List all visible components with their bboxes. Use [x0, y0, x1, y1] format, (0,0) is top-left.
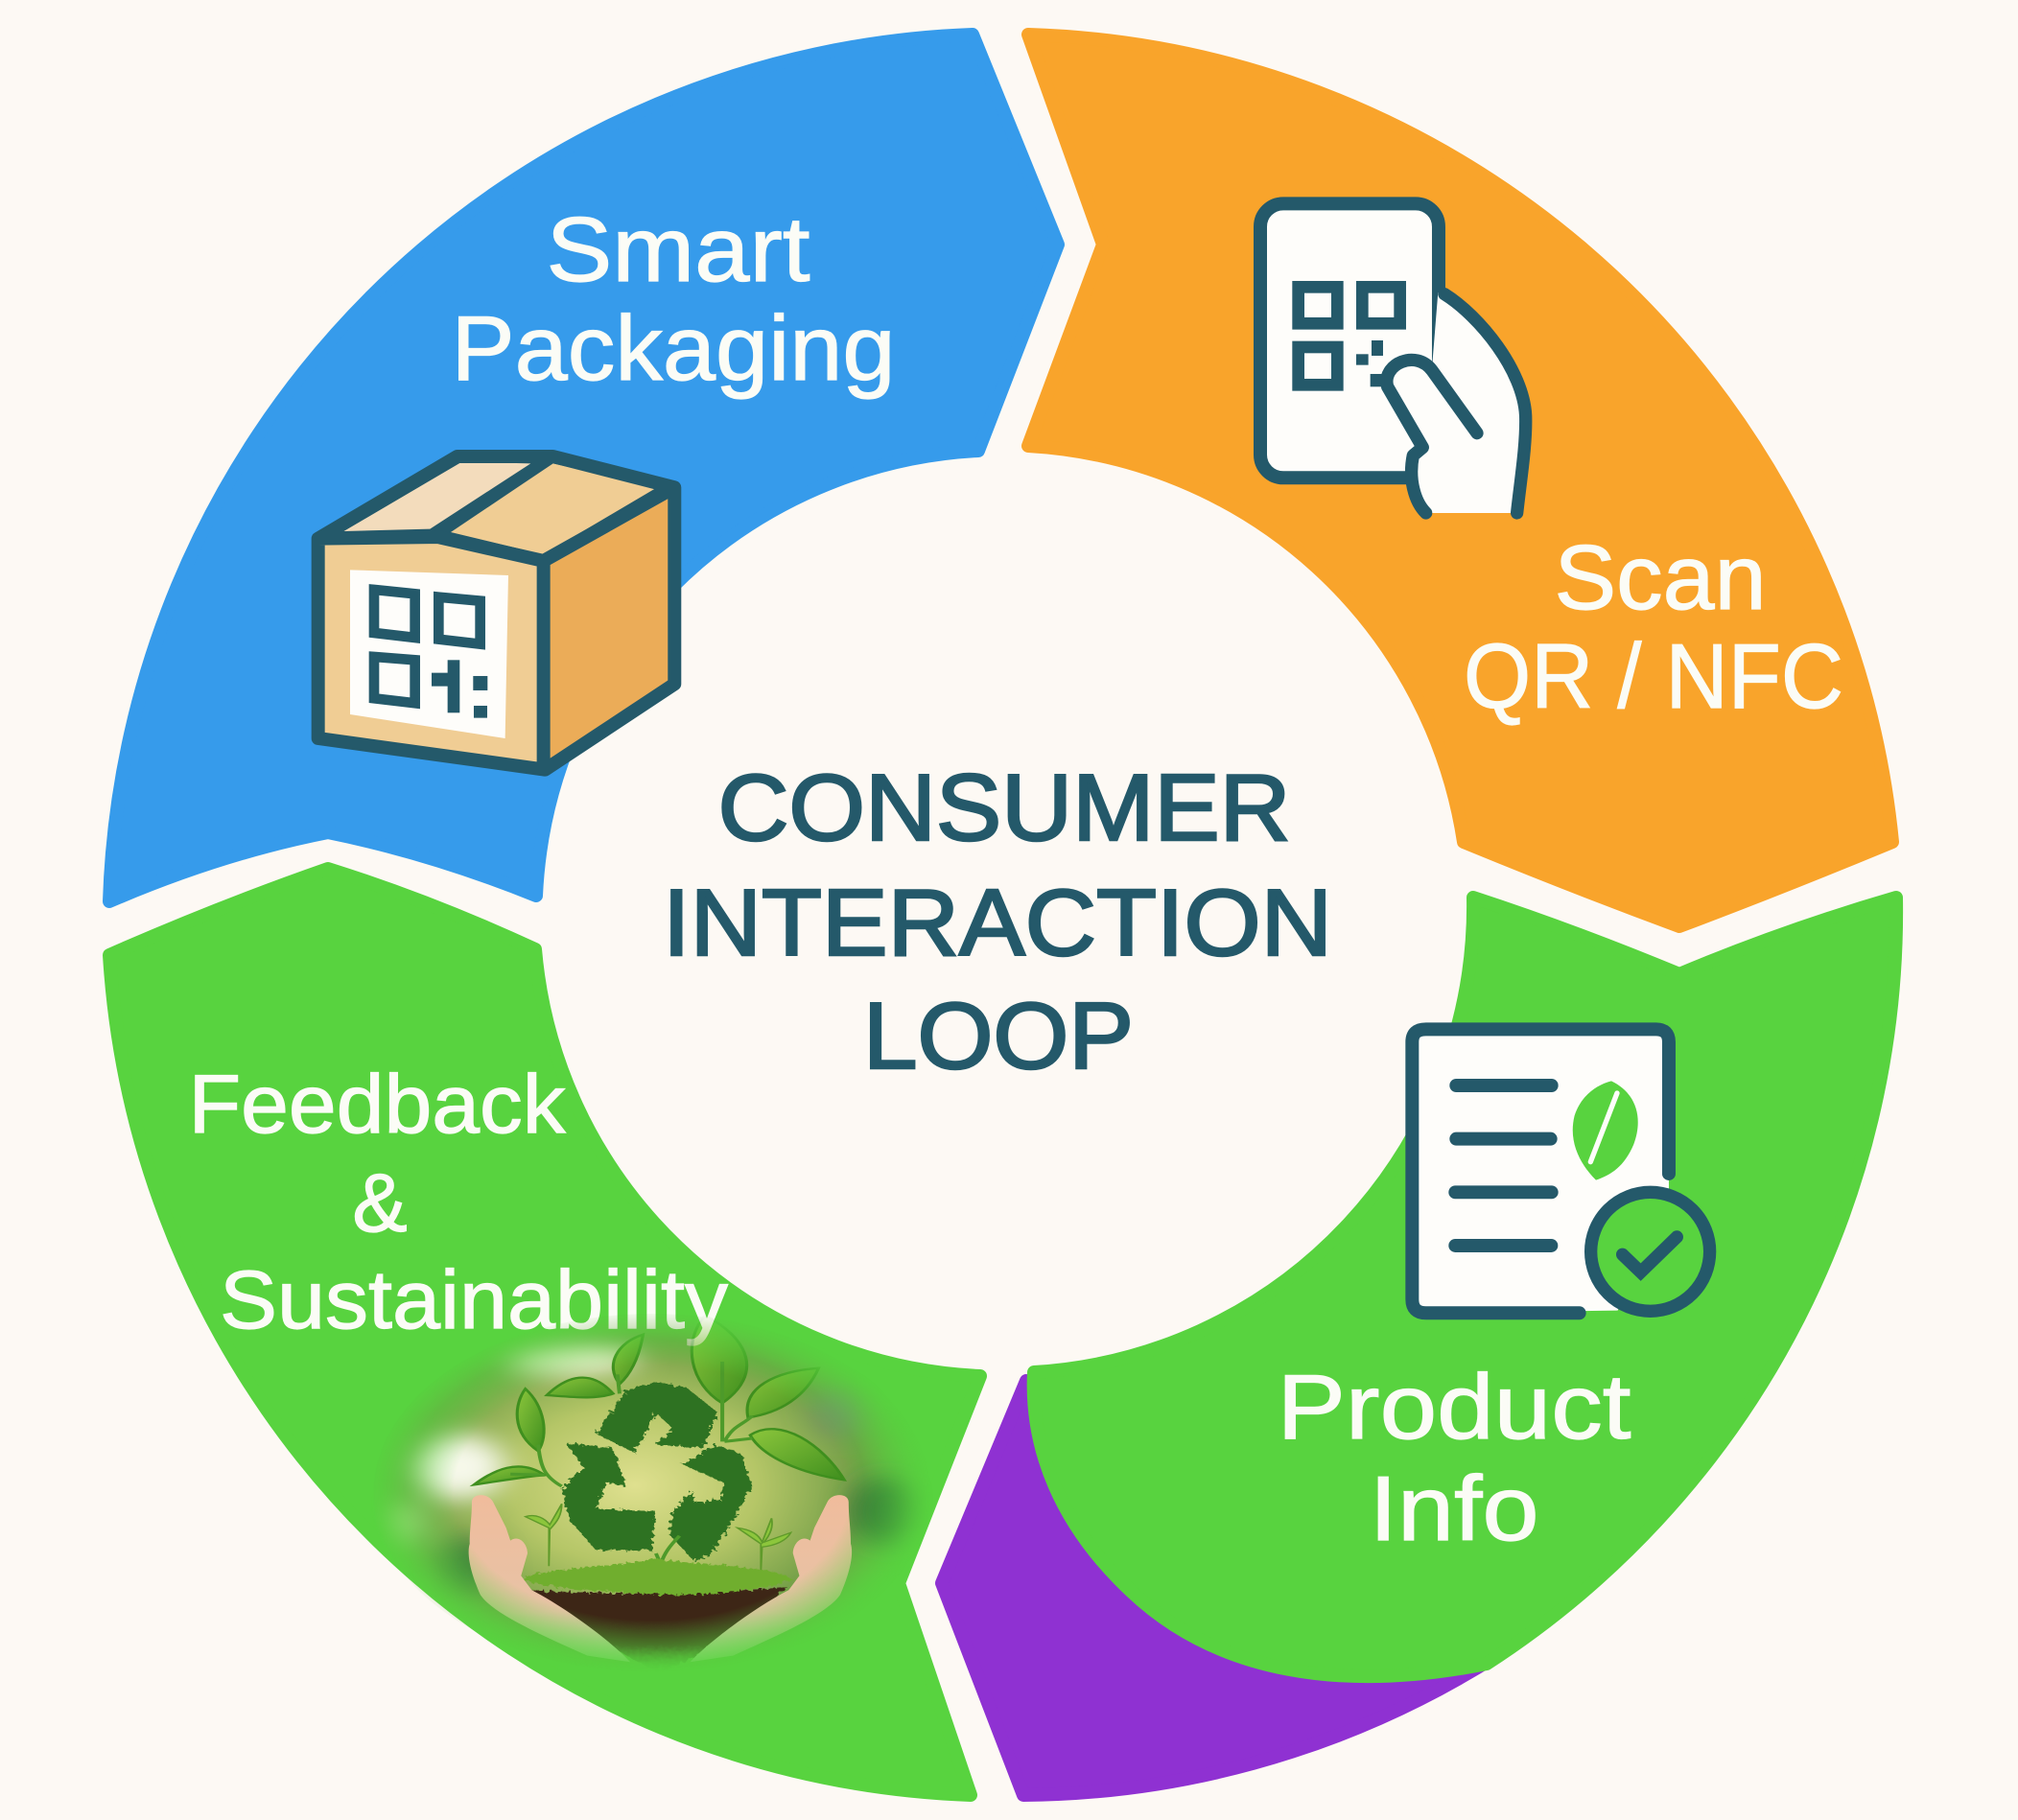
- icon: hand scanning phone: [1260, 203, 1526, 513]
- segment: smart packaging (blue): [109, 35, 1058, 901]
- bokeh highlights: [378, 1342, 922, 1595]
- moss and soil: [519, 1558, 793, 1671]
- segment: scan (orange): [1028, 35, 1892, 926]
- leaves: [474, 1316, 844, 1484]
- segment: purple wedge: [942, 1381, 1535, 1795]
- heading: smart packaging: Packaging: [451, 297, 896, 400]
- heading: feedback and sustainability: &: [352, 1157, 408, 1249]
- sprouts: [526, 1504, 791, 1573]
- title: INTERACTION: [663, 870, 1332, 975]
- heading: scan: Scan: [1554, 526, 1767, 629]
- icon: box with QR code: [318, 456, 674, 770]
- heading: feedback and sustainability: Sustainability: [220, 1254, 728, 1346]
- heading: scan: QR / NFC: [1464, 625, 1843, 728]
- title: LOOP: [863, 983, 1134, 1088]
- segment: feedback and sustainability (green): [109, 869, 980, 1795]
- heading: product info: Product: [1278, 1356, 1631, 1458]
- title: CONSUMER: [717, 755, 1291, 860]
- image: hands holding recycling plant: [373, 1314, 930, 1671]
- right hand: [691, 1495, 852, 1662]
- heading: product info: Info: [1370, 1458, 1538, 1560]
- icon: document with leaf and check: [1412, 1029, 1710, 1313]
- heading: feedback and sustainability: Feedback: [188, 1059, 567, 1151]
- recycling symbol: [562, 1383, 752, 1561]
- heading: smart packaging: Smart: [547, 198, 810, 301]
- photo background: [386, 1314, 903, 1658]
- left hand: [469, 1495, 630, 1662]
- segment: product info (green): [1034, 898, 1896, 1676]
